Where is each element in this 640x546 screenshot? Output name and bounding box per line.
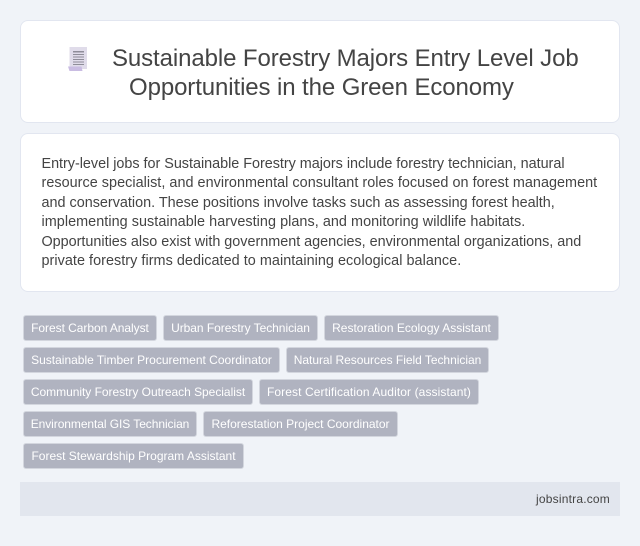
title bbox=[112, 45, 579, 101]
tag bbox=[259, 379, 479, 405]
description text: and conservation. These positions involve tasks such as assessing forest health, bbox=[42, 195, 555, 211]
footer source: jobsintra.com bbox=[536, 492, 610, 506]
tag: Forest Certification Auditor (assistant) bbox=[267, 385, 471, 399]
description panel bbox=[20, 133, 620, 292]
description text: Opportunities also exist with government agencies, environmental organizations, and bbox=[42, 234, 581, 250]
icon: document scroll bbox=[68, 47, 87, 71]
description text: resource specialist, and environmental consultant roles focused on forest management bbox=[42, 175, 597, 191]
description text: implementing sustainable harvesting plans, and monitoring wildlife habitats. bbox=[42, 214, 525, 230]
tag: Restoration Ecology Assistant bbox=[332, 321, 491, 335]
tag: Sustainable Timber Procurement Coordinator bbox=[31, 353, 272, 367]
description text: Entry-level jobs for Sustainable Forestry majors include forestry technician, natural bbox=[42, 156, 564, 172]
title: Sustainable Forestry Majors Entry Level Job bbox=[112, 45, 579, 72]
tag bbox=[23, 347, 280, 373]
tag bbox=[23, 379, 253, 405]
title: Opportunities in the Green Economy bbox=[129, 74, 514, 101]
tag: Natural Resources Field Technician bbox=[294, 353, 481, 367]
tag bbox=[203, 411, 398, 437]
tag: Forest Stewardship Program Assistant bbox=[31, 449, 236, 463]
tag bbox=[286, 347, 489, 373]
description text bbox=[42, 156, 598, 269]
tag: Community Forestry Outreach Specialist bbox=[31, 385, 245, 399]
job tags bbox=[23, 315, 499, 469]
tag bbox=[23, 411, 197, 437]
tag: Forest Carbon Analyst bbox=[31, 321, 149, 335]
footer bar bbox=[20, 482, 620, 516]
tag bbox=[23, 443, 244, 469]
description text: private forestry firms dedicated to maintaining ecological balance. bbox=[42, 253, 461, 269]
tag bbox=[163, 315, 318, 341]
header card bbox=[20, 20, 620, 123]
tag bbox=[324, 315, 499, 341]
tag bbox=[23, 315, 157, 341]
tag: Urban Forestry Technician bbox=[171, 321, 310, 335]
tag: Reforestation Project Coordinator bbox=[211, 417, 390, 431]
tag: Environmental GIS Technician bbox=[31, 417, 189, 431]
